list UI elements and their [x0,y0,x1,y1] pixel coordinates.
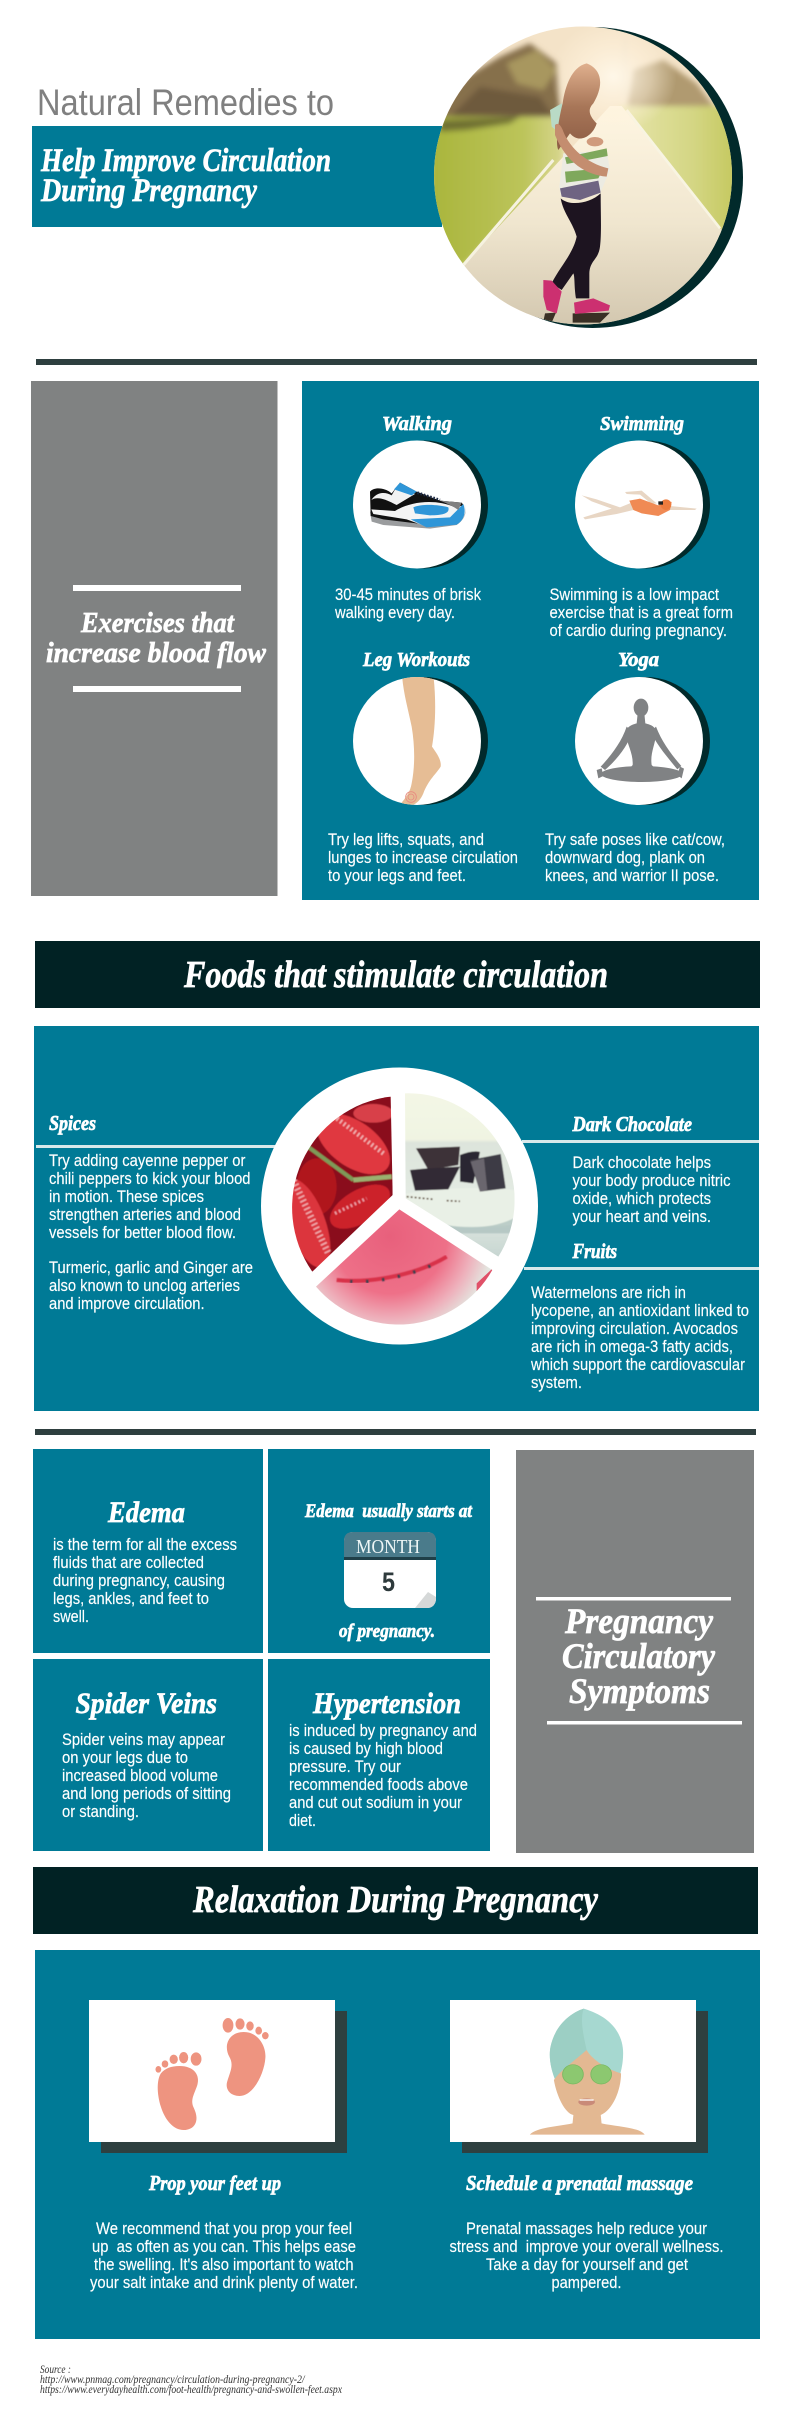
heading: dark chocolate: Dark Chocolate [572,1112,692,1136]
text: dark chocolate: your body produce nitric [572,1171,731,1190]
panel: pregnancy circulatory symptoms: Circulatory [562,1636,716,1676]
text: prenatal massage: Take a day for yourself and get [486,2255,688,2274]
text: dark chocolate: Dark chocolate helps [572,1153,711,1172]
panel: edema: legs, ankles, and feet to [53,1589,209,1608]
text: yoga: downward dog, plank on [545,848,705,867]
panel: spider veins: increased blood volume [62,1766,218,1785]
panel: edema onset: Edema usually starts at [304,1501,473,1522]
icon: calendar: 5 [382,1567,395,1597]
panel: hypertension: recommended foods above [289,1775,468,1794]
panel: relaxation [35,1950,760,2339]
text: leg workouts: to your legs and feet. [328,866,466,885]
text: prop your feet up [90,2219,358,2292]
panel: hypertension: pressure. Try our [289,1757,401,1776]
heading: foods [35,941,760,1008]
heading: schedule a prenatal massage: Schedule a prenatal massage [466,2171,693,2195]
banner heading: Help Improve Circulation [40,143,331,179]
text: fruits: system. [531,1373,582,1392]
text: swimming [550,585,733,640]
panel: edema [33,1449,263,1653]
text: spices: strengthen arteries and blood [49,1205,241,1224]
photo: watermelon [313,1207,497,1327]
heading: relaxation: Relaxation During Pregnancy [192,1879,598,1921]
icon: calendar [344,1532,436,1608]
icon: running shoe [353,440,488,568]
text: spices: vessels for better blood flow. [49,1223,236,1242]
text: spices: in motion. These spices [49,1187,204,1206]
panel: pregnancy circulatory symptoms [516,1450,754,1853]
exercise heading: Walking: Walking [382,413,452,435]
panel: edema onset: of pregnancy. [339,1621,435,1642]
heading: exercises that increase blood flow [46,607,267,669]
heading: exercises that increase blood flow: Exercises that [80,607,235,639]
text: swimming: of cardio during pregnancy. [550,621,727,640]
text: dark chocolate: oxide, which protects [572,1189,711,1208]
divider bar [36,359,757,365]
icon: footprints [155,2018,269,2130]
text: spices: chili peppers to kick your blood [49,1169,250,1188]
text: prenatal massage: pampered. [552,2273,622,2292]
icon: yoga pose [575,677,710,805]
text: prop your feet up: up as often as you can. This helps ease [92,2237,356,2256]
text: swimming: exercise that is a great form [550,603,733,622]
panel: hypertension: is caused by high blood [289,1739,443,1758]
text: spices: Try adding cayenne pepper or [49,1151,246,1170]
exercise heading: Leg Workouts: Leg Workouts [362,649,470,671]
text: swimming: Swimming is a low impact [550,585,719,604]
text: prenatal massage: stress and improve your overall wellness. [450,2237,724,2256]
text: fruits: which support the cardiovascular [530,1355,745,1374]
source citations: http://www.pnmag.com/pregnancy/circulation-during-pregnancy-2/ [40,2374,306,2386]
divider bar [35,1429,756,1435]
panel: hypertension: is induced by pregnancy and [289,1721,477,1740]
card: feet [89,2000,347,2153]
banner heading [40,143,331,209]
title banner [32,126,442,227]
text: dark chocolate: your heart and veins. [572,1207,711,1226]
heading: prop your feet up: Prop your feet up [148,2171,281,2195]
text: spices: and improve circulation. [49,1294,205,1313]
panel: hypertension: Hypertension [312,1687,461,1720]
title: Natural Remedies to: Natural Remedies to [37,82,334,123]
text: prop your feet up: your salt intake and drink plenty of water. [90,2273,358,2292]
panel: hypertension: diet. [289,1811,316,1830]
text: fruits [530,1283,749,1392]
panel: pregnancy circulatory symptoms: Pregnancy [564,1601,714,1641]
text: leg workouts [328,830,518,885]
source citations [40,2364,343,2396]
icon: woman with towel and cucumbers [530,2009,645,2135]
text: fruits: lycopene, an antioxidant linked to [531,1301,749,1320]
exercise heading: Swimming: Swimming [600,413,684,435]
panel: spider veins: on your legs due to [62,1748,188,1767]
panel: foods [34,1026,759,1411]
text: prop your feet up: the swelling. It's also important to watch [94,2255,354,2274]
text: prenatal massage [450,2219,724,2292]
text: leg workouts: lunges to increase circulation [328,848,518,867]
text: yoga: Try safe poses like cat/cow, [545,830,725,849]
banner heading: During Pregnancy [40,173,257,209]
panel: edema: is the term for all the excess [53,1535,237,1554]
heading: fruits: Fruits [572,1239,617,1263]
panel: spider veins: or standing. [62,1802,139,1821]
text: yoga: knees, and warrior II pose. [545,866,719,885]
text: walking: 30-45 minutes of brisk [335,585,481,604]
food wheel [261,1068,567,1344]
panel: hypertension: and cut out sodium in your [289,1793,462,1812]
panel: spider veins: Spider Veins [76,1687,217,1720]
heading: foods: Foods that stimulate circulation [183,954,608,996]
icon: swimmer [575,440,710,568]
hero photo: pregnant woman walking on path [430,20,743,340]
panel: spider veins [33,1659,263,1851]
photo: strawberries [292,1096,393,1272]
text: yoga [545,830,725,885]
panel: edema: swell. [53,1607,89,1626]
heading: relaxation [33,1867,758,1934]
panel: hypertension [268,1659,490,1851]
panel: pregnancy circulatory symptoms: Symptoms [569,1671,710,1711]
text: prenatal massage: Prenatal massages help reduce your [466,2219,707,2238]
panel: exercises [302,381,759,900]
photo: dark chocolate [405,1093,514,1256]
text: leg workouts: Try leg lifts, squats, and [328,830,484,849]
panel: edema: during pregnancy, causing [53,1571,225,1590]
card: massage [450,2000,708,2153]
text: walking [334,585,481,622]
icon: calendar: MONTH [356,1536,420,1558]
text: spices: Turmeric, garlic and Ginger are [49,1258,253,1277]
heading: spices: Spices [49,1111,96,1135]
text: fruits: Watermelons are rich in [531,1283,686,1302]
text: fruits: are rich in omega-3 fatty acids, [531,1337,733,1356]
panel: spider veins: Spider veins may appear [62,1730,225,1749]
text: spices [49,1151,253,1313]
panel: spider veins: and long periods of sitting [62,1784,231,1803]
panel: exercises label [31,381,278,896]
panel: edema: fluids that are collected [53,1553,204,1572]
icon: leg [353,675,488,807]
text: walking: walking every day. [334,603,455,622]
exercise heading: Yoga: Yoga [618,649,659,671]
panel: edema: Edema [107,1496,185,1529]
text: prop your feet up: We recommend that you prop your feel [96,2219,352,2238]
heading: exercises that increase blood flow: increase blood flow [46,637,267,669]
text: spices: also known to unclog arteries [49,1276,240,1295]
source citations: https://www.everydayhealth.com/foot-health/pregnancy-and-swollen-feet.aspx [40,2384,343,2396]
panel: edema onset [268,1449,490,1653]
text: dark chocolate [572,1153,731,1226]
source citations: Source : [40,2364,71,2376]
text: fruits: improving circulation. Avocados [531,1319,738,1338]
